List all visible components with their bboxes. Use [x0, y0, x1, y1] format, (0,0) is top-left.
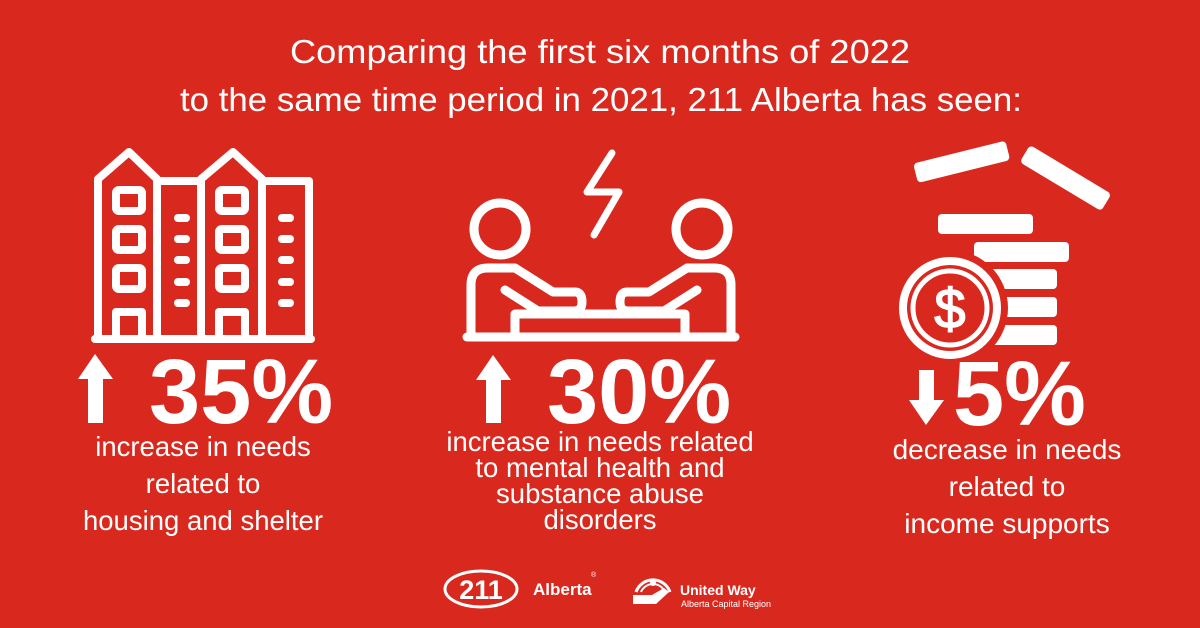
title — [180, 33, 1022, 118]
text: mental health: to mental health and — [475, 452, 725, 483]
text: income: income supports — [904, 508, 1110, 539]
title: Comparing the first six months of 2022 — [290, 33, 910, 70]
text: income: decrease in needs — [893, 434, 1121, 465]
icon: coins — [892, 141, 1111, 366]
text: mental health: substance abuse — [496, 478, 704, 509]
stat: 30%: 30% — [547, 341, 731, 443]
text: mental health: increase in needs related — [446, 426, 754, 457]
icon: coins: $ — [934, 277, 966, 340]
text: housing: increase in needs — [95, 431, 311, 462]
title: to the same time period in 2021, 211 Alberta has seen: — [180, 81, 1022, 118]
stat: 35%: 35% — [149, 341, 333, 443]
logo: United Way — [633, 580, 771, 609]
logo: United Way: United Way — [680, 582, 756, 598]
logo: 211 Alberta: 211 — [459, 575, 503, 605]
text: housing — [83, 431, 323, 536]
icon: people meeting — [467, 153, 735, 337]
text: income: related to — [949, 471, 1065, 502]
logo: 211 Alberta — [445, 571, 597, 607]
text: housing: housing and shelter — [83, 505, 323, 536]
logo: United Way: Alberta Capital Region — [681, 599, 771, 609]
text: income — [893, 434, 1121, 539]
text: mental health: disorders — [543, 504, 657, 535]
logo: 211 Alberta: ® — [591, 571, 597, 579]
icon: buildings — [95, 152, 311, 339]
stat: 5%: 5% — [953, 343, 1086, 445]
logo: 211 Alberta: Alberta — [533, 580, 592, 599]
text: housing: related to — [146, 468, 260, 499]
text: mental health — [446, 426, 754, 535]
